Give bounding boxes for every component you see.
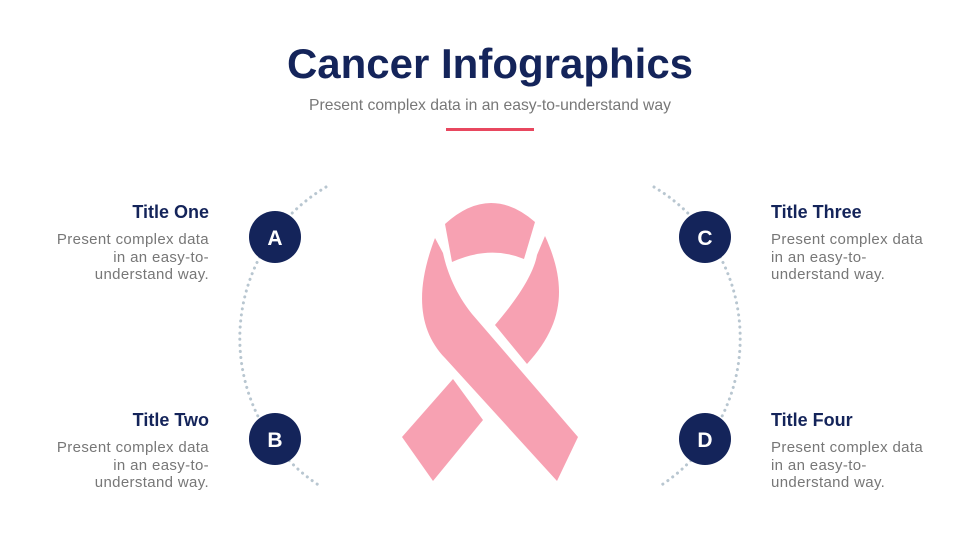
heading: Title Two: Title Two <box>133 410 209 430</box>
text: Title Four: understand way. <box>771 474 885 491</box>
marker A <box>249 211 301 263</box>
heading: Title One: Title One <box>132 202 209 222</box>
text: Title One: in an easy-to- <box>113 248 209 266</box>
text: Title One: understand way. <box>95 266 209 283</box>
text: Title Four <box>771 439 923 491</box>
right dotted arc <box>654 187 740 486</box>
text: Title One <box>57 231 209 283</box>
text: Title Three: understand way. <box>771 266 885 283</box>
heading: Title Three: Title Three <box>771 202 862 222</box>
title: Cancer Infographics <box>287 40 693 87</box>
text: Title Two: Present complex data <box>57 439 209 456</box>
text: Title Two: in an easy-to- <box>113 456 209 474</box>
marker D: D <box>697 429 713 452</box>
left dotted arc <box>240 187 326 486</box>
accent line <box>446 128 534 131</box>
marker A: A <box>267 227 283 250</box>
subtitle: Present complex data in an easy-to-understand way <box>309 97 671 114</box>
text: Title Three: in an easy-to- <box>771 248 867 266</box>
marker C <box>679 211 731 263</box>
marker B: B <box>267 429 283 452</box>
marker B <box>249 413 301 465</box>
text: Title One: Present complex data <box>57 231 209 248</box>
text: Title Two: understand way. <box>95 474 209 491</box>
marker D <box>679 413 731 465</box>
text: Title Two <box>57 439 209 491</box>
heading: Title Four: Title Four <box>771 410 853 430</box>
text: Title Four: in an easy-to- <box>771 456 867 474</box>
text: Title Three <box>771 231 923 283</box>
text: Title Three: Present complex data <box>771 231 923 248</box>
text: Title Four: Present complex data <box>771 439 923 456</box>
icon: pink ribbon <box>402 203 578 481</box>
marker C: C <box>697 227 713 250</box>
